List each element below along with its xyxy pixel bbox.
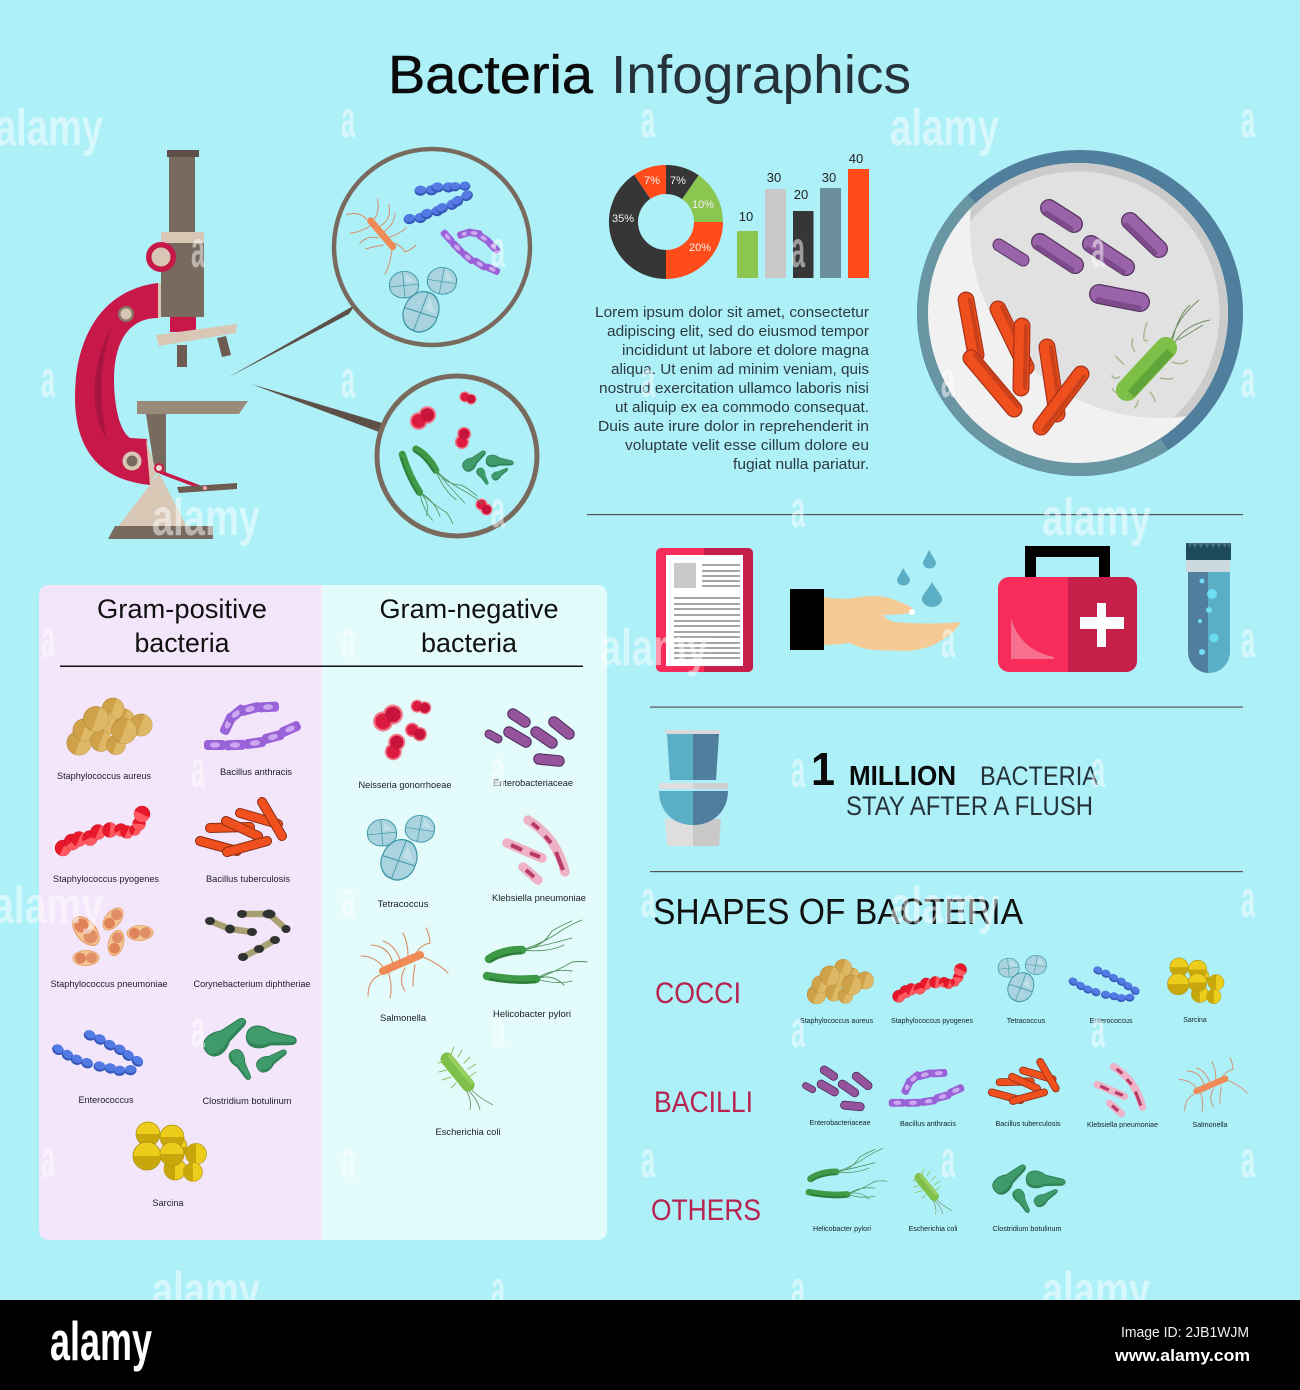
specimen: Bacillus anthracis: [204, 701, 302, 777]
watermark overlay: a: [341, 611, 356, 669]
statistic: 1 million bacteria: 1: [811, 743, 835, 795]
salmonella: [343, 192, 422, 280]
mini: Salmonella: [1179, 1058, 1247, 1129]
title: Bacteria: [388, 45, 594, 105]
helicobacter: [396, 432, 484, 533]
watermark overlay: a: [641, 91, 656, 149]
specimen: Enterobacteriaceae: [489, 714, 573, 788]
watermark overlay: a: [641, 871, 656, 929]
watermark overlay: a: [791, 1261, 806, 1319]
bar chart: 30: [767, 170, 781, 185]
watermark overlay: a: [941, 351, 956, 409]
watermark overlay: a: [491, 221, 506, 279]
donut chart: 7%: [670, 175, 686, 187]
bar chart: 20: [794, 187, 808, 202]
watermark overlay: a: [941, 1131, 956, 1189]
mini: Tetracoccus: Tetracoccus: [1007, 1018, 1046, 1025]
mini: Klebsiella pneumoniae: [1087, 1067, 1158, 1129]
mini: Staphylococcus pyogenes: [891, 964, 973, 1025]
paragraph: nostrud exercitation ullamco laboris nisi: [599, 380, 869, 397]
mini: Helicobacter pylori: [809, 1148, 887, 1233]
watermark overlay: a: [341, 91, 356, 149]
specimen: Klebsiella pneumoniae: [492, 820, 586, 903]
petri dish: [917, 150, 1243, 476]
heading: gram-positive: [97, 594, 267, 658]
specimen: Escherichia coli: [436, 1047, 500, 1137]
heading: gram-positive: bacteria: [134, 628, 230, 658]
specimen: Sarcina: Sarcina: [152, 1198, 184, 1208]
watermark overlay: a: [1241, 1131, 1256, 1189]
specimen: Tetracoccus: Tetracoccus: [378, 899, 429, 909]
statistic: 1 million bacteria: BACTERIA: [980, 761, 1098, 791]
lens: upper magnified view: [334, 149, 530, 345]
mini: Staphylococcus aureus: [800, 959, 876, 1025]
specimen: Escherichia coli: Escherichia coli: [436, 1127, 500, 1137]
watermark overlay: a: [41, 351, 56, 409]
heading: gram-negative: [380, 594, 558, 658]
mini: Salmonella: Salmonella: [1192, 1122, 1228, 1129]
mini: Clostridium botulinum: [990, 1160, 1066, 1233]
panel: gram classification: [39, 585, 607, 1240]
section: others: [651, 1148, 1066, 1233]
statistic: 1 million bacteria: [811, 743, 1098, 821]
specimen: Enterobacteriaceae: Enterobacteriaceae: [493, 778, 573, 788]
anthracis: [439, 210, 513, 286]
watermark overlay: a: [1241, 611, 1256, 669]
watermark overlay: a: [341, 351, 356, 409]
label: bacilli: BACILLI: [654, 1086, 753, 1119]
watermark overlay: a: [191, 1001, 206, 1059]
watermark overlay: a: [491, 1001, 506, 1059]
mini: Enterobacteriaceae: [806, 1070, 871, 1127]
specimen: Neisseria gonorrhoeae: Neisseria gonorrhoeae: [358, 780, 452, 790]
green bacterium: [1112, 300, 1210, 408]
paragraph: adipiscing elit, sed do eiusmod tempor: [607, 323, 869, 340]
mini: Tetracoccus: [998, 953, 1049, 1025]
specimen: Helicobacter pylori: [487, 920, 587, 1019]
paragraph: fugiat nulla pariatur.: [733, 456, 869, 473]
orange rods: [966, 300, 1084, 430]
watermark overlay: a: [1091, 741, 1106, 799]
watermark overlay: a: [1241, 91, 1256, 149]
donut chart: 7%: [644, 175, 660, 187]
watermark overlay: a: [641, 351, 656, 409]
mini: Bacillus tuberculosis: Bacillus tuberculosis: [996, 1121, 1061, 1128]
specimen: Staphylococcus pneumoniae: Staphylococcus pneumoniae: [50, 979, 168, 989]
paragraph: ut aliquip ex ea commodo consequat.: [615, 399, 869, 416]
purple rods: [999, 208, 1159, 308]
watermark overlay: a: [1241, 351, 1256, 409]
section: bacilli: [654, 1058, 1247, 1129]
bar chart: 40: [849, 151, 863, 166]
watermark overlay: alamy: [890, 99, 999, 157]
watermark overlay: a: [1091, 221, 1106, 279]
watermark overlay: a: [791, 221, 806, 279]
specimen: Staphylococcus pyogenes: Staphylococcus pyogenes: [53, 874, 159, 884]
label: cocci: COCCI: [655, 977, 741, 1010]
divider: [650, 871, 1243, 872]
specimen: Helicobacter pylori: Helicobacter pylori: [493, 1009, 571, 1019]
icon: test tube: [1186, 543, 1231, 673]
watermark overlay: alamy: [600, 619, 708, 677]
watermark overlay: a: [341, 871, 356, 929]
watermark overlay: a: [341, 1131, 356, 1189]
mini: Klebsiella pneumoniae: Klebsiella pneumoniae: [1087, 1122, 1158, 1129]
paragraph: aliqua. Ut enim ad minim veniam, quis: [611, 361, 869, 378]
specimen: Bacillus tuberculosis: Bacillus tuberculosis: [206, 874, 290, 884]
specimen: Clostridium botulinum: [200, 1012, 297, 1106]
watermark overlay: a: [41, 1131, 56, 1189]
watermark overlay: alamy: [890, 877, 999, 935]
watermark overlay: a: [941, 611, 956, 669]
clostridium: [460, 447, 514, 486]
paragraph: incididunt ut labore et dolore magna: [622, 342, 870, 359]
specimen: Clostridium botulinum: Clostridium botulinum: [202, 1096, 292, 1106]
specimen: Staphylococcus aureus: [57, 698, 155, 781]
bar chart: [737, 151, 869, 278]
icon: hand with water drops: [790, 550, 961, 651]
heading: gram-positive: Gram-positive: [97, 594, 267, 624]
footer bar: [0, 1300, 1300, 1390]
tetracoccus: [389, 264, 460, 337]
mini: Bacillus anthracis: Bacillus anthracis: [900, 1121, 957, 1128]
specimen: Bacillus tuberculosis: [200, 802, 290, 884]
footer url: www.alamy.com: [1114, 1346, 1250, 1365]
bar chart: 30: [822, 170, 836, 185]
specimen: Sarcina: [133, 1122, 206, 1208]
watermark overlay: a: [491, 481, 506, 539]
section: cocci: [655, 953, 1224, 1025]
mini: Enterobacteriaceae: Enterobacteriaceae: [810, 1120, 871, 1127]
mini: Escherichia coli: Escherichia coli: [908, 1226, 958, 1233]
specimen: Corynebacterium diphtheriae: Corynebacterium diphtheriae: [194, 979, 310, 989]
mini: Bacillus anthracis: [889, 1069, 965, 1128]
title: Infographics: [611, 45, 911, 105]
donut chart: 20%: [689, 242, 711, 254]
specimen: Klebsiella pneumoniae: Klebsiella pneumoniae: [492, 893, 586, 903]
specimen: Staphylococcus pyogenes: [53, 806, 159, 884]
divider: [587, 514, 1243, 515]
mini: Enterococcus: Enterococcus: [1090, 1018, 1133, 1025]
lens pointer: upper: [227, 305, 355, 378]
donut chart: [609, 165, 723, 279]
specimen: Salmonella: [361, 928, 448, 1023]
watermark overlay: alamy: [152, 1262, 260, 1320]
microscope: [75, 150, 248, 539]
mini: Helicobacter pylori: Helicobacter pylori: [813, 1226, 871, 1233]
specimen: Corynebacterium diphtheriae: [194, 910, 310, 989]
title: [388, 45, 911, 105]
mini: Staphylococcus aureus: Staphylococcus aureus: [800, 1018, 873, 1025]
lens pointer: lower: [251, 384, 382, 432]
heading: gram-negative: bacteria: [421, 628, 518, 658]
donut chart: 10%: [692, 199, 714, 211]
icon: first aid kit: [998, 546, 1137, 672]
donut chart: 35%: [612, 213, 634, 225]
mini: Bacillus tuberculosis: [992, 1062, 1061, 1128]
watermark overlay: a: [641, 1131, 656, 1189]
mini: Sarcina: Sarcina: [1183, 1017, 1207, 1024]
mini: Clostridium botulinum: Clostridium botulinum: [992, 1226, 1062, 1233]
specimen: Enterococcus: Enterococcus: [78, 1095, 134, 1105]
watermark overlay: a: [191, 221, 206, 279]
paragraph: Duis aute irure dolor in reprehenderit in: [598, 418, 869, 435]
watermark overlay: a: [491, 1261, 506, 1319]
mini: Escherichia coli: [908, 1169, 958, 1233]
mini: Sarcina: [1168, 958, 1224, 1024]
watermark overlay: a: [791, 741, 806, 799]
statistic: 1 million bacteria: STAY AFTER A FLUSH: [846, 791, 1093, 821]
specimen: Neisseria gonorrhoeae: [358, 698, 452, 790]
divider: [650, 706, 1243, 708]
specimen: Bacillus anthracis: Bacillus anthracis: [220, 767, 292, 777]
watermark overlay: a: [1091, 1001, 1106, 1059]
heading: gram-negative: Gram-negative: [380, 594, 558, 624]
watermark overlay: alamy: [152, 489, 260, 547]
paragraph: Lorem ipsum dolor sit amet, consectetur: [595, 304, 869, 321]
watermark overlay: alamy: [1042, 489, 1151, 547]
footer logo: alamy: [50, 1310, 152, 1372]
paragraph: voluptate velit esse cillum dolore eu: [625, 437, 869, 454]
specimen: Staphylococcus pneumoniae: [50, 904, 168, 989]
heading: shapes of bacteria: SHAPES OF BACTERIA: [653, 891, 1023, 932]
specimen: Enterococcus: [50, 1028, 145, 1105]
label: others: OTHERS: [651, 1194, 761, 1227]
watermark overlay: a: [791, 1001, 806, 1059]
lens: lower magnified view: [377, 376, 537, 536]
specimen: Staphylococcus aureus: Staphylococcus aureus: [57, 771, 151, 781]
watermark overlay: a: [791, 481, 806, 539]
icon: toilet: [659, 730, 728, 846]
watermark overlay: a: [1241, 871, 1256, 929]
watermark overlay: a: [41, 611, 56, 669]
specimen: Tetracoccus: [367, 812, 438, 909]
neisseria: [406, 390, 495, 518]
watermark overlay: a: [491, 741, 506, 799]
footer image id: Image ID: 2JB1WJM: [1121, 1324, 1249, 1341]
statistic: 1 million bacteria: MILLION: [849, 760, 956, 791]
mini: Staphylococcus pyogenes: Staphylococcus pyogenes: [891, 1018, 973, 1025]
chain of enterococcus: [403, 181, 475, 225]
mini: Enterococcus: [1067, 965, 1141, 1025]
watermark overlay: a: [191, 741, 206, 799]
specimen: Salmonella: Salmonella: [380, 1013, 427, 1023]
bar chart: 10: [739, 209, 753, 224]
watermark overlay: alamy: [1042, 1262, 1150, 1320]
paragraph: [595, 304, 870, 473]
icon: document tablet: [656, 548, 753, 672]
